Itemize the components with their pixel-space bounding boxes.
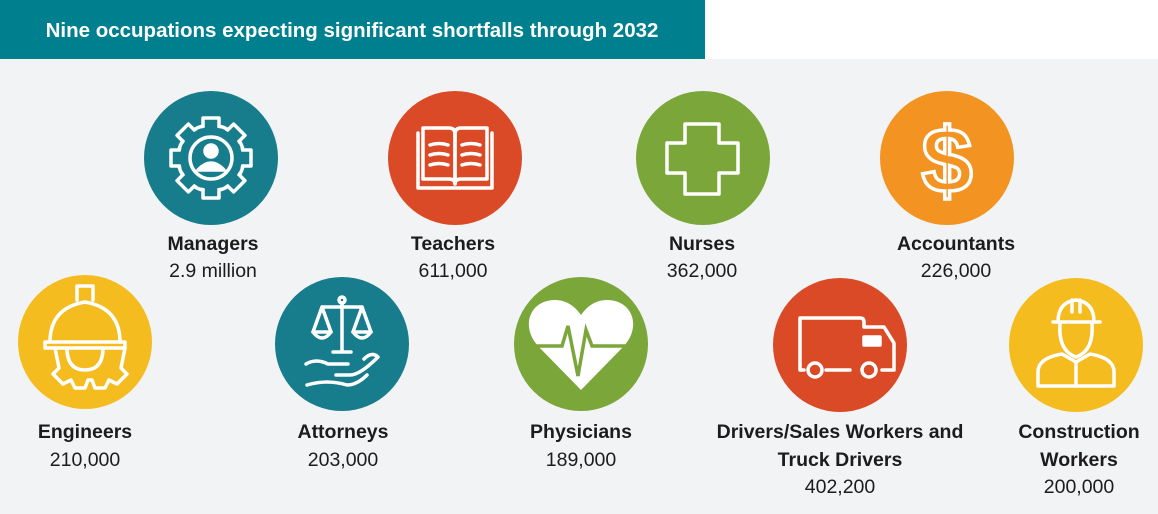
item: drivers: 402,200 [805, 476, 875, 498]
item: construction workers: Workers [1040, 449, 1118, 471]
item: construction workers: Construction [1018, 421, 1140, 443]
item: drivers [717, 278, 963, 498]
item: accountants [880, 91, 1015, 282]
item: attorneys: Attorneys [297, 421, 389, 443]
item: managers [144, 91, 278, 282]
item: engineers [18, 275, 152, 471]
item: accountants: Accountants [897, 233, 1015, 255]
icon: scales in hand [306, 297, 378, 385]
item: nurses [636, 91, 770, 282]
icon: gear with person [171, 118, 251, 198]
item: teachers [388, 91, 522, 282]
item: accountants: 226,000 [921, 260, 991, 282]
item: nurses: 362,000 [667, 260, 737, 282]
icon: book [418, 128, 492, 188]
icon: hard hat gear [45, 286, 127, 388]
icon: worker with helmet [1038, 300, 1114, 386]
item: teachers: 611,000 [418, 260, 488, 282]
icon: heart with pulse [529, 300, 633, 390]
item: managers: 2.9 million [169, 260, 257, 282]
item: physicians: 189,000 [546, 449, 616, 471]
icon: truck [800, 318, 894, 377]
item: drivers: Truck Drivers [778, 449, 902, 471]
item: construction workers: 200,000 [1044, 476, 1114, 498]
item: construction workers [1009, 278, 1143, 498]
icon: dollar: $ [921, 110, 973, 212]
item: attorneys [275, 277, 409, 471]
item: engineers: Engineers [38, 421, 132, 443]
icon: cross [667, 124, 738, 194]
item: teachers: Teachers [411, 233, 495, 255]
item: nurses: Nurses [669, 233, 735, 255]
item: drivers: Drivers/Sales Workers and [717, 421, 963, 443]
item: attorneys: 203,000 [308, 449, 378, 471]
item: managers: Managers [167, 233, 259, 255]
title banner: Nine occupations expecting significant shortfalls through 2032 [46, 19, 658, 42]
item: physicians: Physicians [530, 421, 632, 443]
item: engineers: 210,000 [50, 449, 120, 471]
title banner [0, 0, 705, 59]
item: physicians [514, 277, 648, 471]
